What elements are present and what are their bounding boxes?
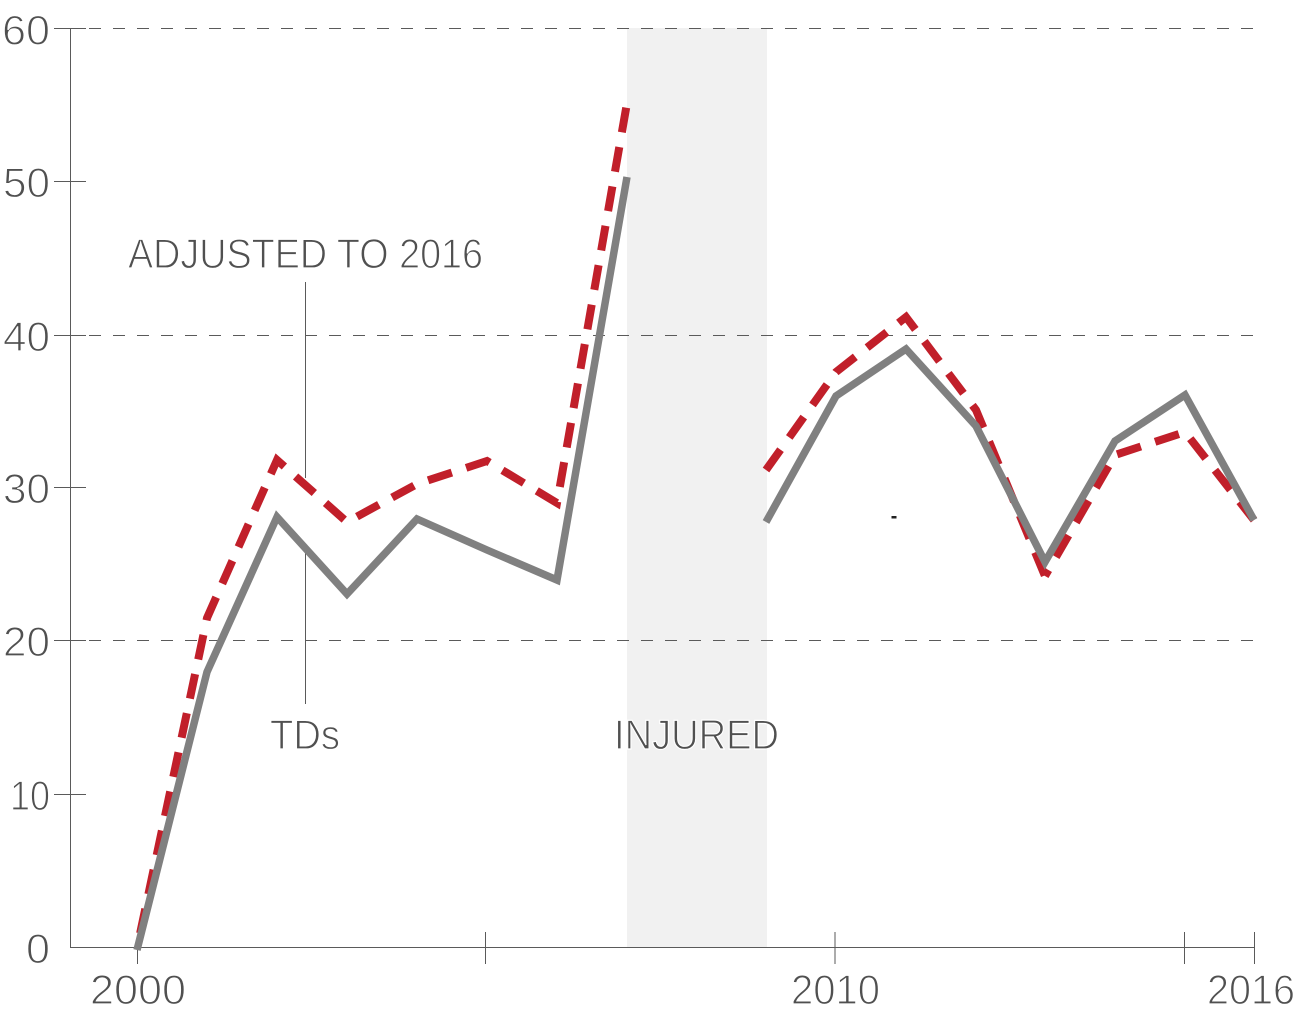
y axis: 40	[3, 313, 50, 360]
actual TDs line, gray	[137, 177, 1254, 950]
y axis: 20	[3, 618, 50, 665]
leader line between labels	[304, 282, 306, 704]
adjusted line, red dashed	[137, 103, 1254, 948]
y axis: 0	[26, 925, 50, 972]
label: adjusted to 2016: ADJUSTED TO 2016	[128, 230, 483, 277]
y axis: 10	[10, 772, 50, 819]
x axis: 2000	[90, 966, 186, 1013]
x axis: 2010	[791, 966, 880, 1013]
y axis: 60	[2, 6, 50, 54]
small stray mark	[892, 516, 896, 518]
y axis: 50	[3, 159, 50, 206]
x axis	[70, 932, 1295, 1013]
label: TDs: TDs	[270, 711, 340, 758]
injured season band	[627, 28, 767, 948]
y axis	[2, 6, 86, 972]
label: injured: INJURED	[614, 711, 779, 758]
y axis: 30	[3, 465, 50, 512]
